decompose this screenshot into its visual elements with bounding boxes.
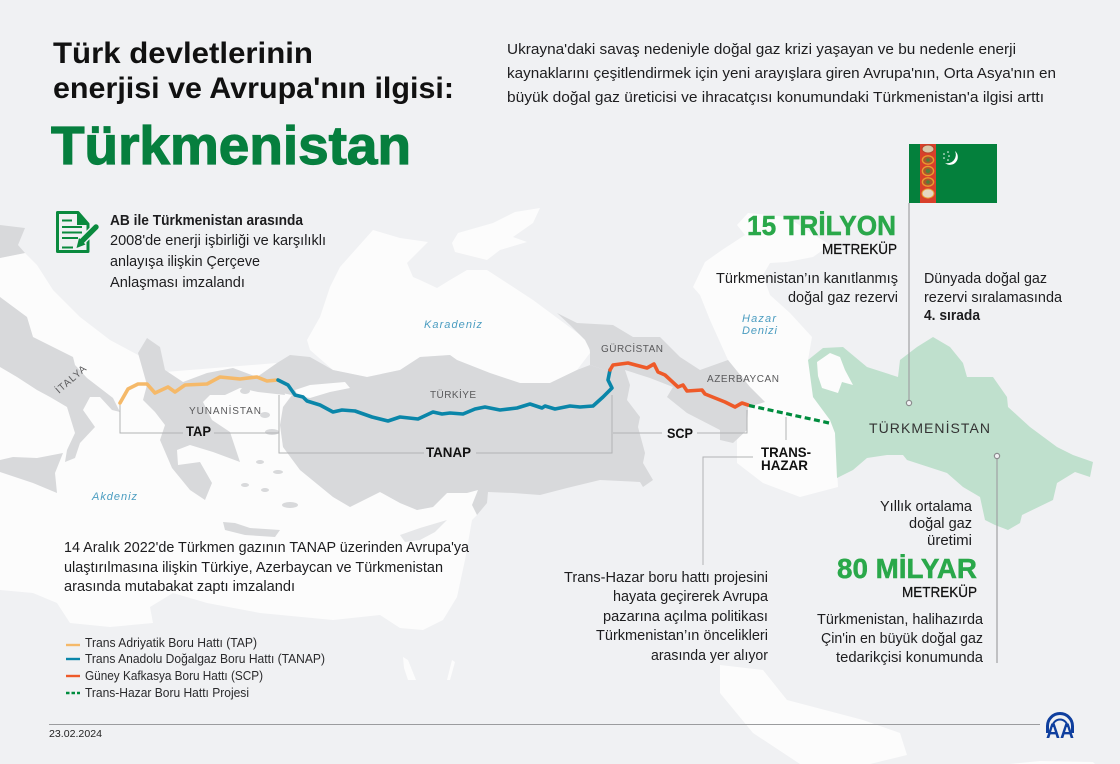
land: Greece and Albania — [138, 338, 285, 500]
title: Türk devletlerinin — [53, 37, 313, 70]
heading: Türkmenistan: Türkmenistan — [51, 116, 411, 176]
flag pole and marker — [906, 203, 912, 406]
legend: Trans Anadolu Doğalgaz Boru Hattı (TANAP) — [85, 652, 325, 666]
text: Trans-Caspian project: hayata geçirerek Avrupa — [613, 588, 769, 605]
pipeline labels: SCP — [667, 425, 693, 441]
stat: 4th rank: rezervi sıralamasında — [924, 289, 1063, 306]
text: memorandum: 14 Aralık 2022'de Türkmen gazının TANAP üzerinden Avrupa'ya — [64, 539, 470, 556]
text: Trans-Caspian project: pazarına açılma politikası — [603, 608, 768, 625]
sea: Mediterranean, Adriatic and Aegean — [0, 253, 478, 630]
land: Sicily — [0, 453, 63, 493]
icon: flag of Turkmenistan — [909, 144, 997, 203]
intro text: kaynaklarını çeşitlendirmek için yeni arayışlara giren Avrupa'nın, Orta Asya'nın en — [507, 65, 1056, 82]
sea: Red Sea gulfs — [403, 657, 416, 680]
country labels: TÜRKMENİSTAN — [869, 419, 990, 436]
land: Aegean islands — [240, 388, 298, 508]
stat: 80 billion: Çin'in en büyük doğal gaz — [821, 630, 983, 647]
sea: Marmara — [295, 382, 350, 398]
legend: Güney Kafkasya Boru Hattı (SCP) — [85, 669, 263, 683]
text: framework agreement: Anlaşması imzalandı — [110, 274, 245, 291]
stat: 80 billion: METREKÜP — [902, 583, 977, 601]
text: Trans-Caspian project: arasında yer alıyor — [651, 647, 768, 664]
sea: Persian Gulf — [720, 665, 907, 764]
land: Türkiye — [277, 355, 653, 515]
stat: 15 trillion: 15 TRİLYON — [747, 210, 896, 241]
sea: Sea of Azov — [452, 208, 540, 260]
stat: 4th rank — [924, 270, 1063, 324]
map of the region — [0, 208, 1095, 764]
stat: 80 billion: doğal gaz — [909, 515, 972, 532]
text: memorandum: ulaştırılmasına ilişkin Türkiye, Azerbaycan ve Türkmenistan — [64, 559, 443, 576]
title: enerjisi ve Avrupa'nın ilgisi: — [53, 72, 454, 105]
logo: AA: AA — [1046, 720, 1074, 743]
text: Trans-Caspian project — [564, 569, 769, 664]
stat: 15 trillion: METREKÜP — [822, 240, 897, 258]
text: framework agreement: 2008'de enerji işbirliği ve karşılıklı — [110, 232, 326, 249]
pipeline labels — [186, 423, 811, 473]
pipeline: Trans-Caspian dashed — [749, 406, 829, 423]
title — [53, 37, 454, 105]
country labels — [52, 342, 990, 436]
footer rule — [49, 724, 1040, 726]
land: Cyprus — [400, 520, 447, 542]
text: memorandum: arasında mutabakat zaptı imzalandı — [64, 578, 295, 595]
sea: Kara-Bogaz-Gol — [817, 353, 853, 393]
stat: 80 billion: Yıllık ortalama — [880, 498, 973, 515]
stat: 15 trillion — [716, 210, 898, 306]
pipeline: TANAP — [278, 370, 612, 421]
country labels: YUNANİSTAN — [189, 404, 261, 417]
intro text: büyük doğal gaz üreticisi ve ihracatçısı konumundaki Türkmenistan'a ilgisi arttı — [507, 89, 1044, 106]
land: Georgia and Azerbaijan — [557, 313, 765, 443]
leader lines — [120, 395, 786, 565]
land: Slovenia — [0, 225, 25, 258]
sea labels: Akdeniz — [91, 491, 138, 503]
sea: Gulf of Oman — [1010, 761, 1095, 764]
stat: 80 billion: 80 MİLYAR — [837, 553, 977, 584]
pipeline: SCP — [610, 363, 748, 407]
text: framework agreement — [110, 212, 326, 291]
country labels: AZERBAYCAN — [707, 374, 779, 385]
country labels: TÜRKİYE — [430, 388, 476, 401]
pipeline: TAP — [120, 377, 278, 403]
sea labels: Karadeniz — [424, 319, 482, 331]
stat: 80 billion: tedarikçisi konumunda — [836, 649, 984, 666]
pipeline labels: TRANS- — [761, 444, 811, 460]
pipeline labels: TAP — [186, 423, 211, 439]
pipeline labels: HAZAR — [761, 457, 808, 473]
stat: 15 trillion: doğal gaz rezervi — [788, 289, 898, 306]
stat: 80 billion: üretimi — [927, 532, 972, 549]
land: Crete — [223, 522, 280, 537]
pipeline labels: TANAP — [426, 444, 471, 460]
text: framework agreement: AB ile Türkmenistan arasında — [110, 212, 304, 229]
land: Italy — [0, 297, 120, 462]
stat: 15 trillion: Türkmenistan’ın kanıtlanmış — [716, 270, 898, 287]
legend: Trans-Hazar Boru Hattı Projesi — [85, 686, 249, 700]
date: 23.02.2024 — [49, 728, 102, 740]
sea labels — [91, 313, 778, 503]
country labels: İTALYA — [52, 362, 89, 396]
text: memorandum — [64, 539, 470, 595]
text: Trans-Caspian project: Türkmenistan’ın öncelikleri — [596, 627, 768, 644]
sea: Caspian Sea — [693, 213, 838, 497]
stat: 4th rank: Dünyada doğal gaz — [924, 270, 1047, 287]
stat: 4th rank: 4. sırada — [924, 307, 981, 324]
intro text — [507, 41, 1056, 106]
legend — [66, 636, 325, 700]
intro text: Ukrayna'daki savaş nedeniyle doğal gaz krizi yaşayan ve bu nedenle enerji — [507, 41, 1016, 58]
sea labels: Denizi — [742, 325, 778, 337]
sea: Black Sea — [307, 230, 590, 383]
sea: Gulf of Aqaba — [447, 660, 455, 680]
country labels: GÜRCİSTAN — [601, 342, 663, 355]
legend: Trans Adriyatik Boru Hattı (TAP) — [85, 636, 257, 650]
text: Trans-Caspian project: Trans-Hazar boru hattı projesini — [564, 569, 768, 586]
text: framework agreement: anlayışa ilişkin Çerçeve — [110, 253, 260, 270]
icon: document with pen — [58, 212, 96, 252]
stat: 80 billion: Türkmenistan, halihazırda — [817, 611, 984, 628]
land: Turkmenistan — [808, 337, 1093, 530]
sea labels: Hazar — [742, 313, 777, 325]
stat: 80 billion — [817, 498, 984, 666]
production marker line — [994, 453, 1000, 663]
